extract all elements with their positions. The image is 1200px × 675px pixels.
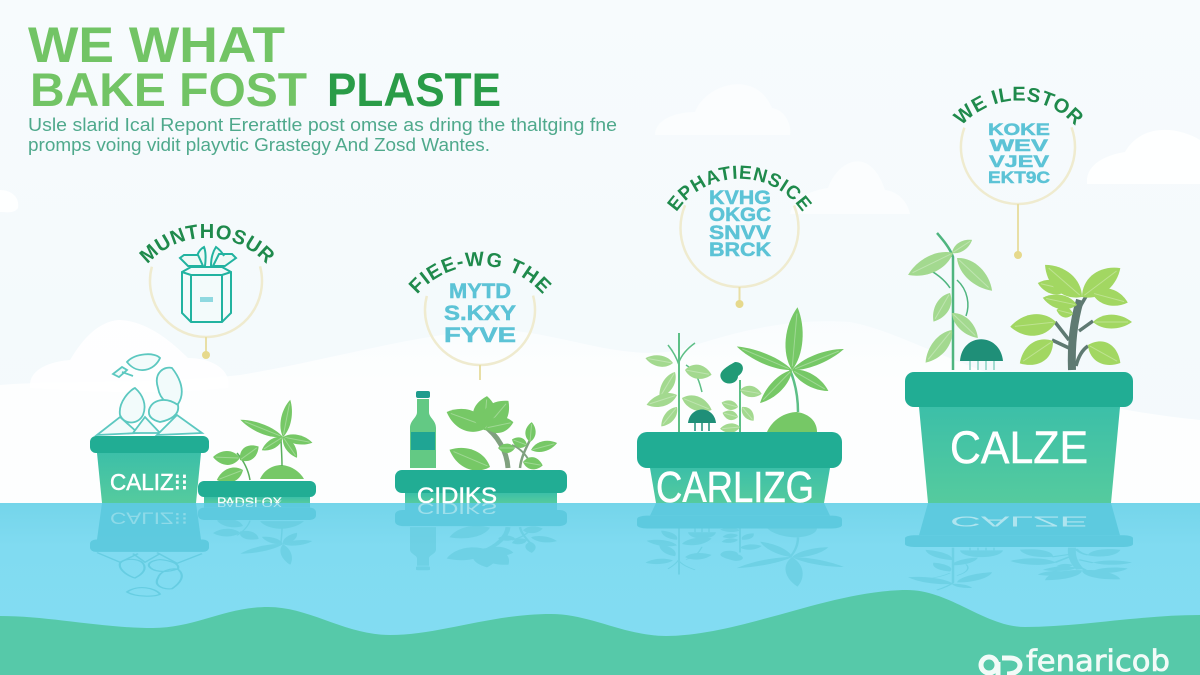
low planter <box>198 481 316 503</box>
pot group 3: plants and planter <box>637 306 846 503</box>
pot label: Padslox: PADSLOX <box>217 495 282 509</box>
reflection 1: bin: CALIZ⁝⁝ <box>110 508 188 527</box>
callout 4 glyph text: VJEV <box>989 152 1050 171</box>
callout 3 glyph text <box>709 188 771 261</box>
left cloud <box>30 320 229 392</box>
callout 3 glyph text: SNVV <box>709 223 771 244</box>
pot group 2: bottle and planter <box>395 391 567 503</box>
reflection 3: planter <box>637 503 842 529</box>
background white hills <box>0 321 1200 510</box>
small plant right <box>213 399 313 487</box>
low planter <box>395 470 567 503</box>
callout 2 heading: FIEE-WG THE <box>408 252 552 294</box>
stalk <box>905 233 998 370</box>
palm <box>735 306 846 432</box>
subtitle text block: Usle slarid Ical Repont Ererattle post omse as dring the thaltging fne <box>28 114 617 135</box>
callout 3 heading: EPHATIENSICE <box>666 166 812 212</box>
pot group 4: plants and planter <box>905 233 1133 503</box>
logo <box>981 644 1170 675</box>
callout 4 glyph text: WEV <box>990 136 1049 155</box>
icon: package <box>180 247 236 322</box>
reflection 2: plants <box>410 522 558 570</box>
panel: callout 4 We ilestor <box>952 86 1082 259</box>
callout 4 glyph text: EKT9C <box>988 168 1050 187</box>
callout 3 glyph text: OKGC <box>709 205 771 226</box>
panel: callout 2 Fiee-wg the <box>408 252 552 380</box>
callout 4 glyph text <box>988 120 1050 187</box>
foreground green wave <box>0 590 1200 675</box>
pot label: Carlizg: CARLIZG <box>656 463 814 512</box>
pot label: Calze: CALZE <box>950 422 1088 473</box>
tree <box>1009 257 1132 373</box>
reflection 4: planter: CALZE <box>950 513 1088 530</box>
reflection 2: planter: CIDIKS <box>417 499 497 516</box>
mushroom <box>688 410 716 431</box>
subtitle text block <box>28 114 617 155</box>
callout 2 glyph text: S.KXY <box>444 302 516 325</box>
title: BAKE FOST <box>30 63 307 116</box>
big bin <box>90 436 209 503</box>
reflection 4: planter <box>905 503 1133 547</box>
panel: callout 3 Ephatiensice <box>666 166 812 308</box>
panel: callout 1 Munthosur <box>139 224 274 359</box>
pot group 1: bags and small planter <box>90 354 316 503</box>
reflection 4: plants <box>905 547 1132 590</box>
reflection 1: low planter: PADSLOX <box>217 498 282 508</box>
tree and sprig <box>443 393 558 477</box>
water reflections <box>90 498 1133 596</box>
title: PLASTE <box>327 63 501 116</box>
bags outline pile <box>97 354 202 435</box>
callout 4 glyph text: KOKE <box>988 120 1050 139</box>
reflection 3: plants <box>644 527 846 587</box>
subtitle text block: promps voing vidit playvtic Grastegy And Zosd Wantes. <box>28 134 490 155</box>
callout 3 glyph text: BRCK <box>709 240 771 261</box>
reflection 2: planter <box>395 499 567 526</box>
planter <box>905 372 1133 503</box>
plant: bottle and tree <box>410 391 558 477</box>
callout 2 glyph text: FYVE <box>444 324 516 347</box>
water <box>0 503 1200 675</box>
logo mark <box>981 657 1020 675</box>
reflection 1: bin <box>90 503 209 552</box>
callout 4 heading: WE ILESTOR <box>952 86 1082 126</box>
callout 2 glyph text <box>444 280 516 347</box>
reflection 1: low planter <box>198 498 316 520</box>
pot label: Caliz: CALIZ⁝⁝ <box>110 469 188 495</box>
bottle <box>410 391 436 468</box>
planter <box>637 432 842 503</box>
reflection 1: bags outline <box>97 553 202 596</box>
background clouds <box>0 84 1200 214</box>
callout 2 glyph text: MYTD <box>449 280 511 303</box>
reflection 1: small plant <box>213 517 313 565</box>
plants <box>644 306 846 434</box>
pot label: Cidiks: CIDIKS <box>417 483 497 508</box>
callout 3 glyph text: KVHG <box>709 188 771 209</box>
plants <box>905 233 1132 373</box>
title: WE WHAT <box>28 17 285 73</box>
mushroom <box>960 339 1003 370</box>
callout 1 heading: MUNTHOSUR <box>139 224 274 264</box>
stalks <box>644 333 763 434</box>
title <box>28 17 501 116</box>
